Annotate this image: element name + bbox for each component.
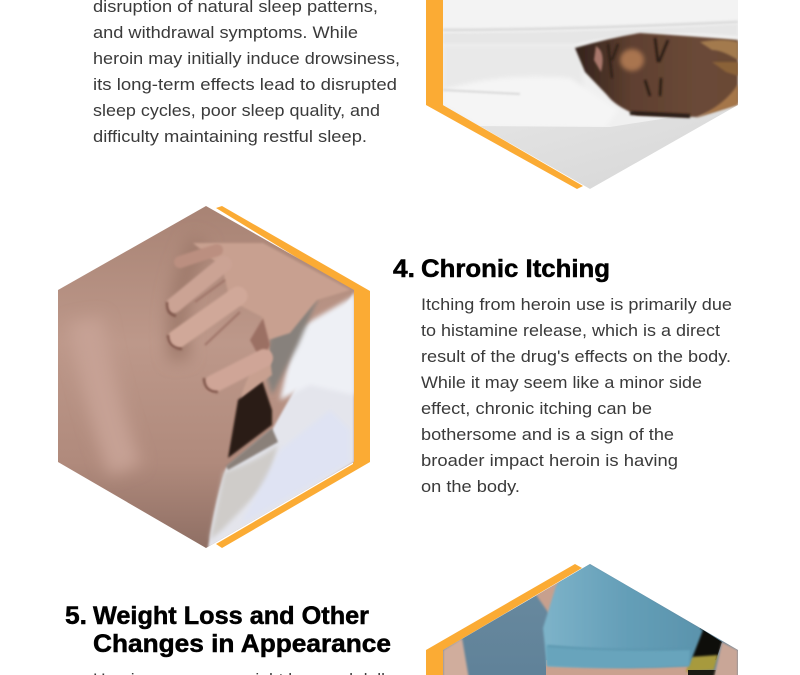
section 5 heading: Weight Loss and Other Changes in Appearance [65,602,391,658]
hand [193,243,350,398]
section 4 heading: Chronic Itching: 4. [393,255,415,283]
section 4 body text: bothersome and is a sign of the [421,426,674,444]
section 5 heading: Weight Loss and Other Changes in Appearance: Changes in Appearance [93,630,391,658]
section 3 body text: sleep disruption [93,0,400,146]
section 3 body text: sleep disruption: sleep cycles, poor sleep quality, and [93,102,380,120]
section 4 heading: Chronic Itching: Chronic Itching [421,255,610,283]
section 4 body text [421,296,732,496]
section 5 heading: Weight Loss and Other Changes in Appearance: Weight Loss and Other [93,602,369,630]
section 4 body text: to histamine release, which is a direct [421,322,720,340]
section 3 body text: sleep disruption: difficulty maintaining restful sleep. [93,128,367,146]
orange hexagon accent, weight loss photo [426,564,582,675]
section 4 body text: While it may seem like a minor side [421,374,702,392]
section 3 body text: sleep disruption: and withdrawal symptoms. While [93,24,358,42]
section 4 body text: Itching from heroin use is primarily due [421,296,732,314]
section 3 body text: sleep disruption: its long-term effects lead to disrupted [93,76,397,94]
section 4 body text: broader impact heroin is having [421,452,678,470]
section 4 body text: on the body. [421,478,520,496]
orange hexagon accent, itching photo [216,206,370,548]
section 4 body text: effect, chronic itching can be [421,400,652,418]
hexagon photo: person sleeping under pillow [426,0,738,200]
hexagon photo: hand scratching skin [58,206,370,548]
hexagon photo: thin torso in blue top [426,564,738,675]
section 4 body text: result of the drug's effects on the body. [421,348,731,366]
section 5 heading: Weight Loss and Other Changes in Appearance: 5. [65,602,87,630]
section 3 body text: sleep disruption: heroin may initially induce drowsiness, [93,50,400,68]
orange hexagon accent, sleep photo [426,0,583,189]
